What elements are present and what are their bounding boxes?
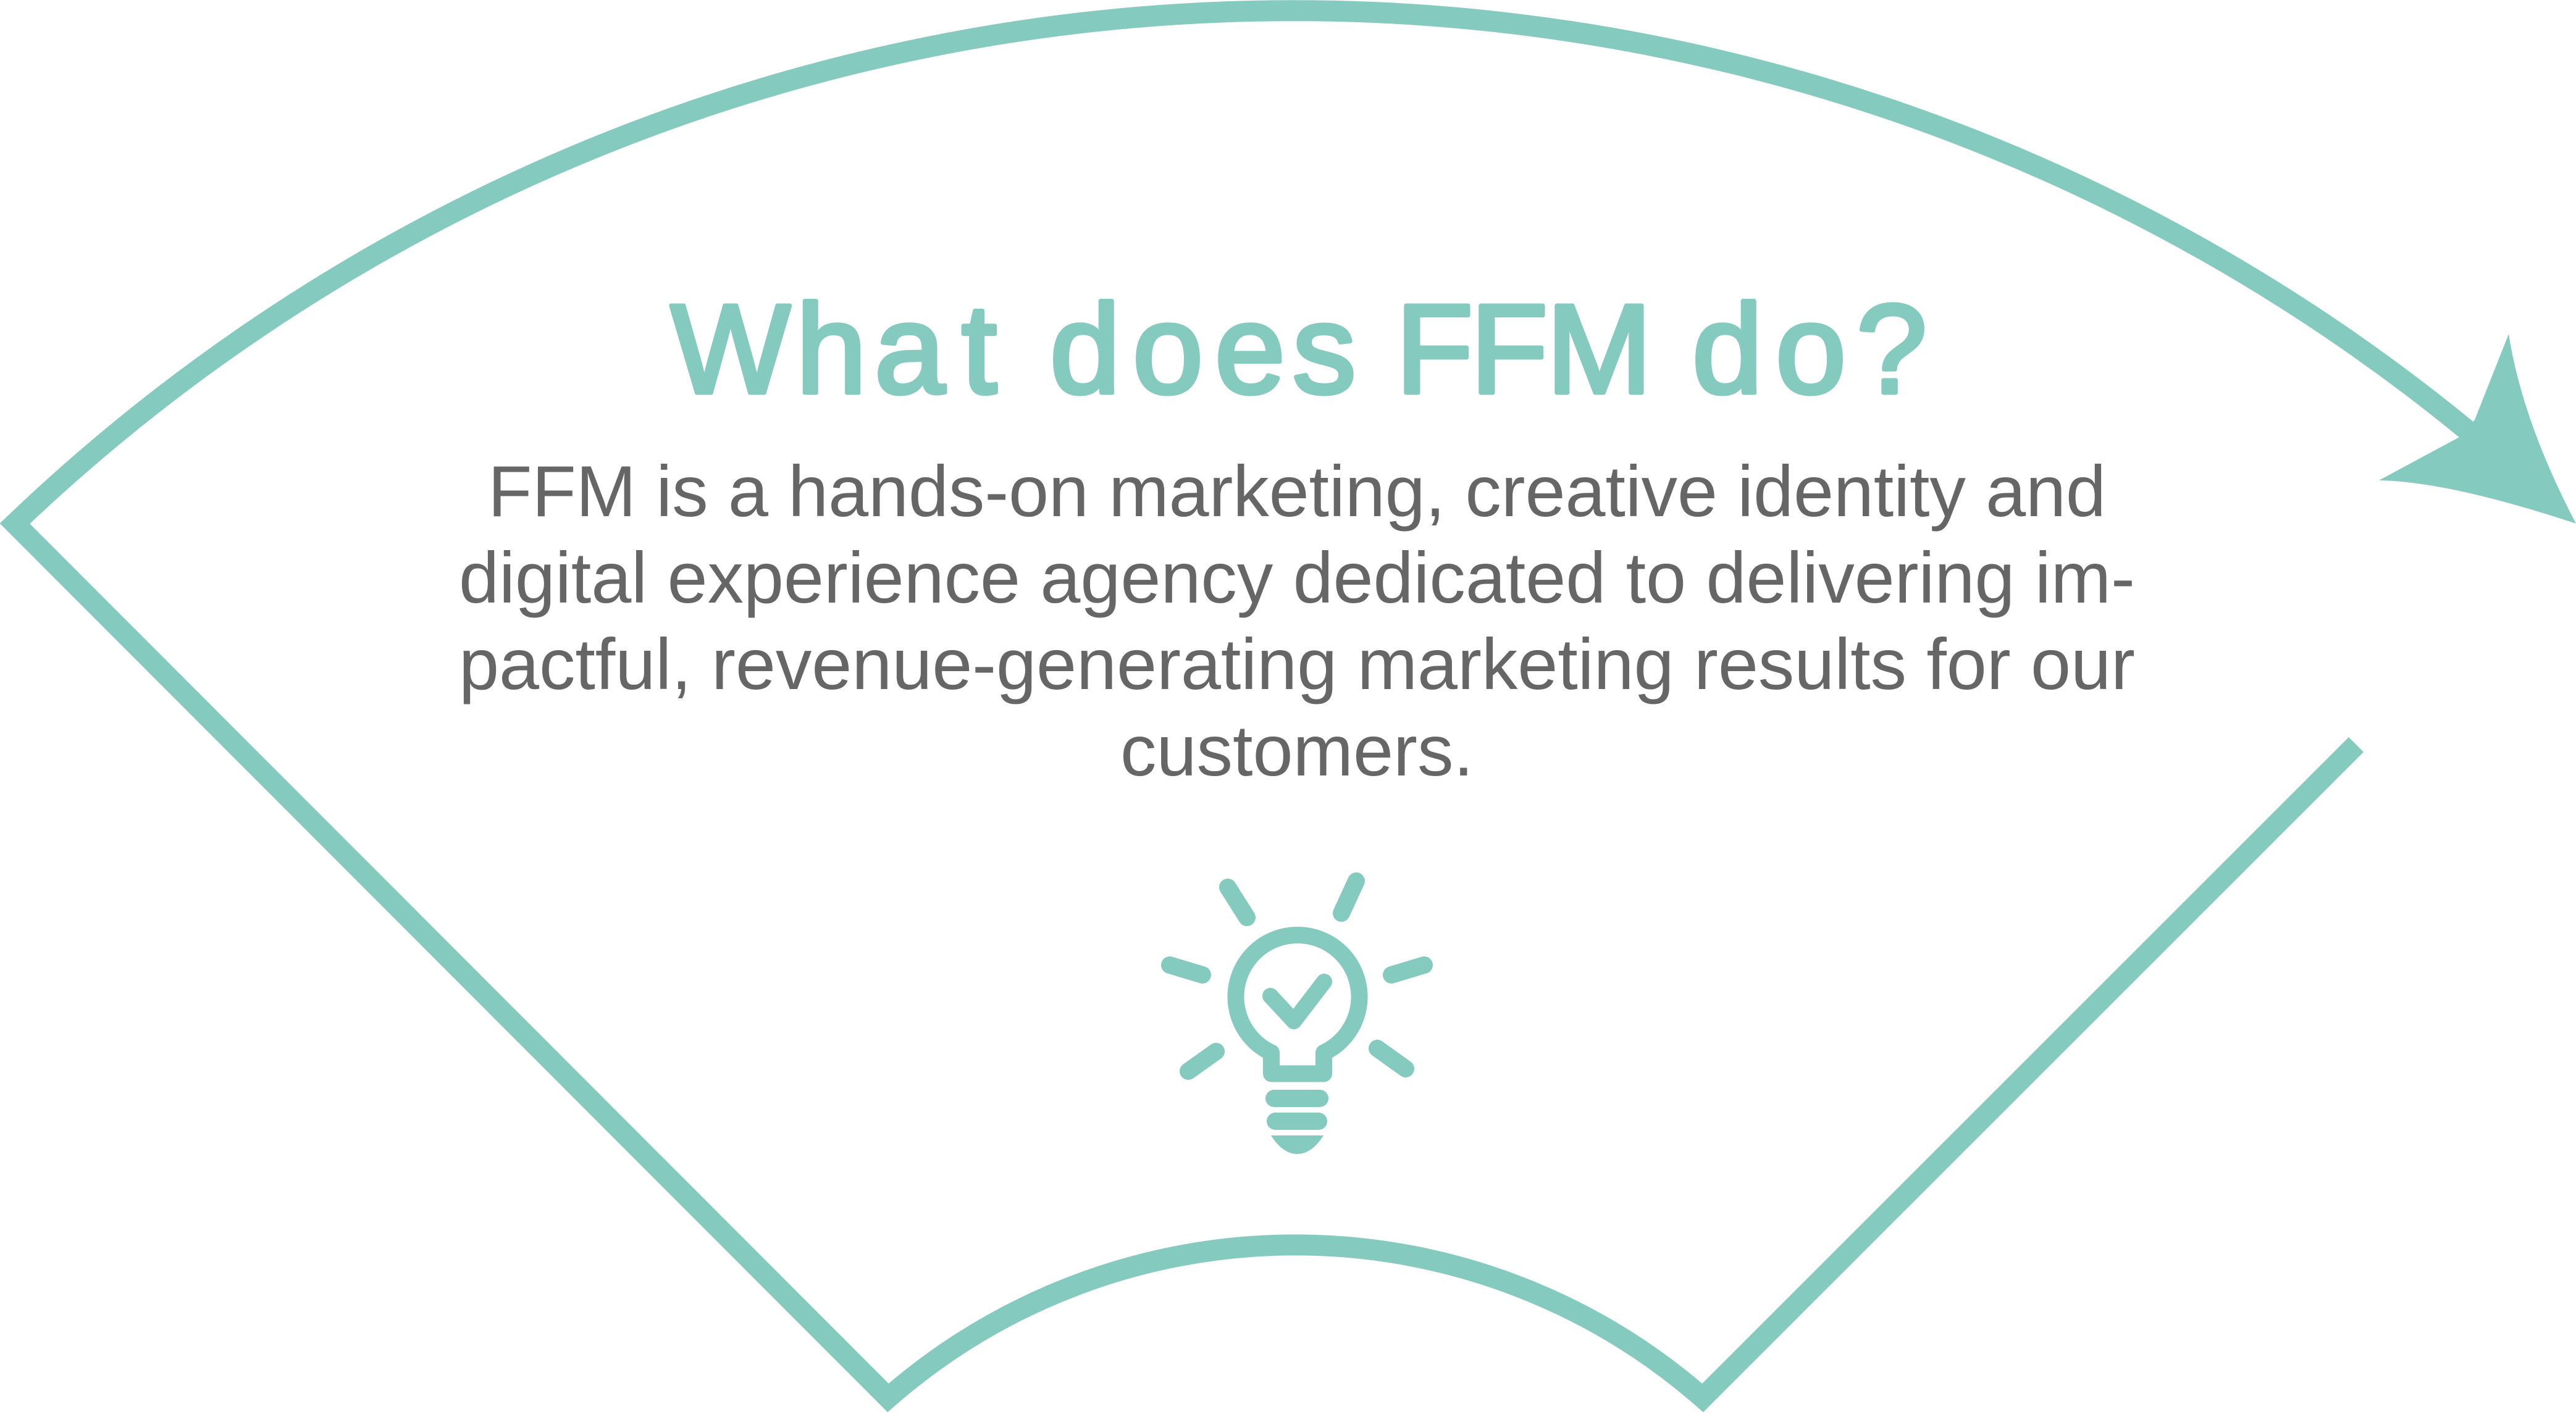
- body text: [459, 451, 2135, 791]
- body text: pactful, revenue-generating marketing results for our: [459, 624, 2135, 704]
- body text: customers.: [1120, 710, 1474, 791]
- body text: digital experience agency dedicated to delivering im-: [459, 537, 2135, 618]
- icon: light bulb with check mark: [1170, 881, 1424, 1154]
- body text: FFM is a hands-on marketing, creative identity and: [488, 451, 2106, 532]
- heading: What does FFM do?: [671, 278, 1927, 420]
